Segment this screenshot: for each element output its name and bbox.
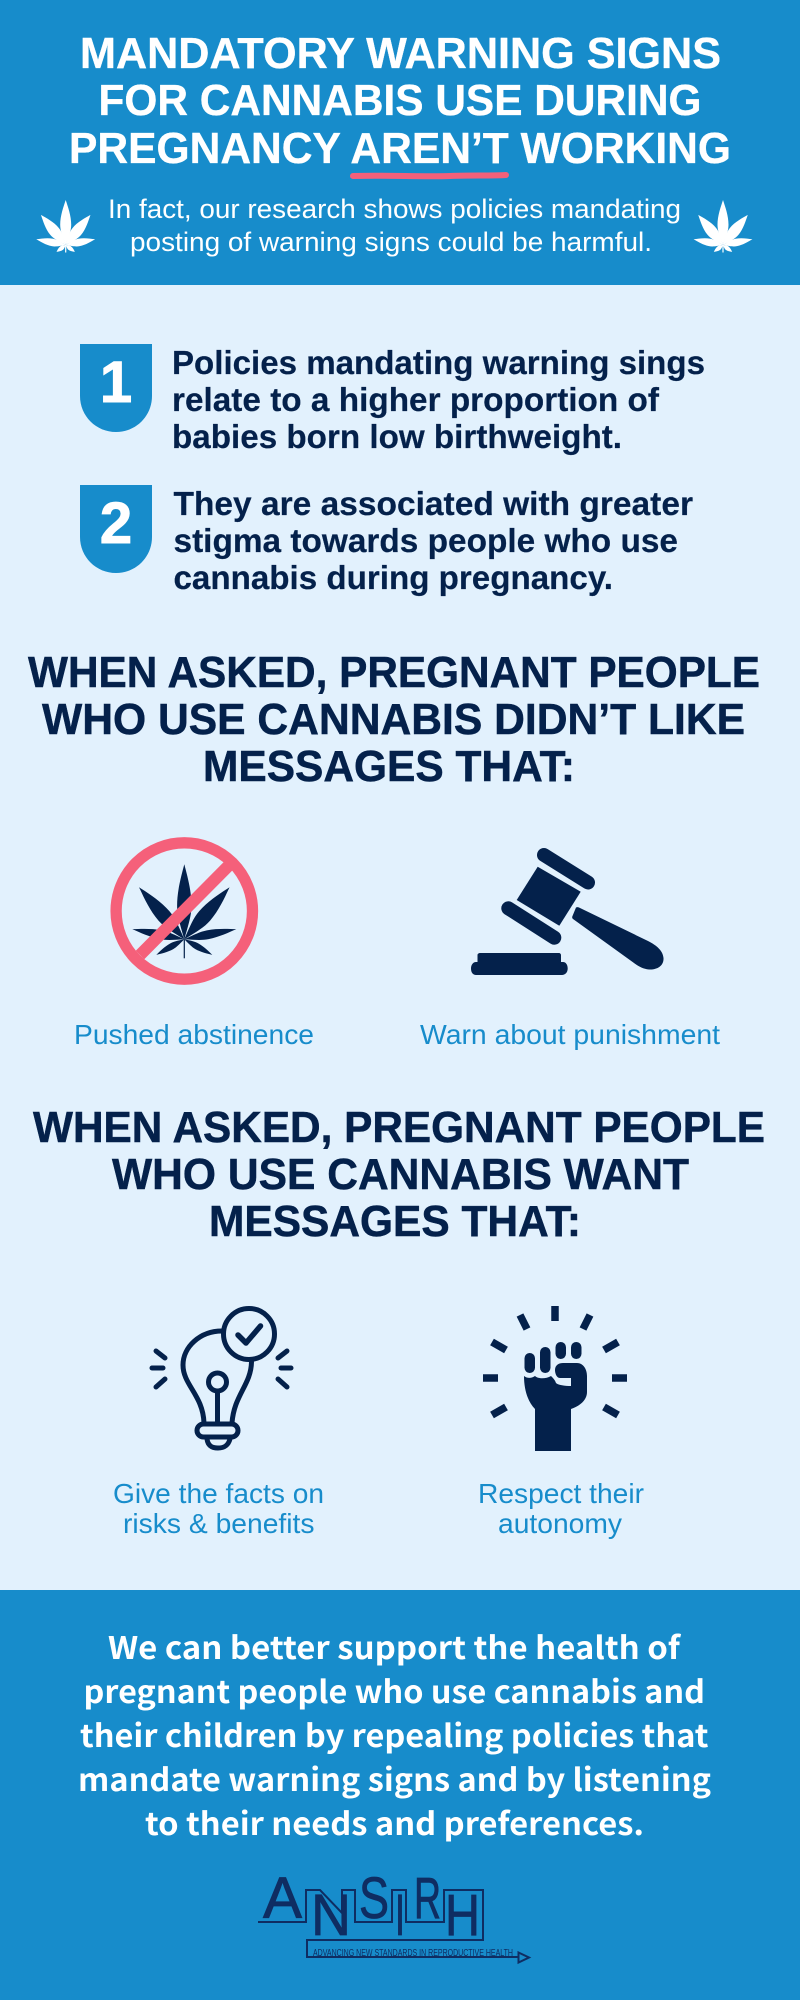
label: respect their autonomy: Respect their	[478, 1478, 644, 1509]
footer call to action text: mandate warning signs and by listening	[78, 1755, 711, 1800]
logo: ANSIRH: I	[395, 1883, 405, 1948]
label: respect their autonomy	[478, 1478, 644, 1539]
logo: ANSIRH: S	[359, 1866, 389, 1931]
footer call to action text: their children by repealing policies that	[80, 1711, 708, 1756]
title: MANDATORY WARNING SIGNS	[80, 29, 721, 78]
icon: light bulb with check mark	[152, 1308, 291, 1448]
heading: messages they want: WHEN ASKED, PREGNANT PEOPLE	[33, 1103, 765, 1152]
label: give the facts: Give the facts on	[113, 1478, 324, 1509]
badge: number 1	[80, 344, 152, 432]
label: give the facts	[113, 1478, 324, 1539]
heading: messages they want: MESSAGES THAT:	[209, 1197, 581, 1246]
finding 2 text: stigma towards people who use	[174, 522, 678, 559]
title	[69, 29, 731, 173]
icon: white cannabis leaf left	[36, 200, 96, 254]
pink underline under AREN'T	[353, 175, 506, 176]
finding 1 text: babies born low birthweight.	[172, 418, 622, 455]
icon: gavel	[471, 855, 664, 975]
heading: messages they didn't like	[28, 648, 760, 791]
panel: findings list	[80, 344, 705, 596]
panel: footer	[0, 1590, 800, 2000]
label: give the facts: risks & benefits	[123, 1508, 314, 1539]
logo: ANSIRH: A	[263, 1866, 302, 1931]
subtitle: posting of warning signs could be harmful.	[130, 227, 652, 257]
logo: ANSIRH: N	[311, 1883, 351, 1948]
finding 2 text: They are associated with greater	[174, 485, 693, 522]
logo: ANSIRH: R	[414, 1866, 441, 1931]
heading: messages they want: WHO USE CANNABIS WANT	[112, 1150, 689, 1199]
finding 2 text	[174, 485, 693, 596]
icon: raised fist	[483, 1306, 627, 1451]
badge: number 1: 1	[100, 350, 132, 415]
heading: messages they didn't like: WHO USE CANNABIS DIDN’T LIKE	[42, 695, 745, 744]
finding 2 text: cannabis during pregnancy.	[174, 559, 613, 596]
label: pushed abstinence: Pushed abstinence	[74, 1019, 314, 1050]
logo: ANSIRH	[258, 1866, 529, 1962]
heading: messages they want	[33, 1103, 765, 1246]
subtitle: In fact, our research shows policies mandating	[108, 194, 681, 224]
badge: number 2	[80, 485, 152, 573]
label: warn about punishment: Warn about punishment	[420, 1019, 720, 1050]
icon: white cannabis leaf right	[693, 200, 753, 254]
finding 1 text: Policies mandating warning sings	[172, 344, 705, 381]
heading: messages they didn't like: WHEN ASKED, PREGNANT PEOPLE	[28, 648, 760, 697]
icon: crossed-out cannabis leaf	[116, 843, 252, 979]
panel: header	[0, 0, 800, 285]
footer call to action text: to their needs and preferences.	[145, 1799, 644, 1844]
finding 1 text: relate to a higher proportion of	[172, 381, 660, 418]
logo: ANSIRH: H	[445, 1883, 480, 1948]
badge: number 2: 2	[100, 491, 132, 556]
label: respect their autonomy: autonomy	[498, 1508, 622, 1539]
footer call to action text: We can better support the health of	[108, 1623, 682, 1668]
subtitle	[108, 194, 681, 257]
title: FOR CANNABIS USE DURING	[98, 76, 702, 125]
heading: messages they didn't like: MESSAGES THAT:	[203, 742, 575, 791]
title: PREGNANCY AREN’T WORKING	[69, 124, 731, 173]
footer call to action text	[78, 1623, 711, 1844]
logo: ANSIRH: ADVANCING NEW STANDARDS IN REPRODUCTIVE HEALTH	[313, 1948, 513, 1959]
footer call to action text: pregnant people who use cannabis and	[84, 1667, 705, 1712]
finding 1 text	[172, 344, 705, 455]
